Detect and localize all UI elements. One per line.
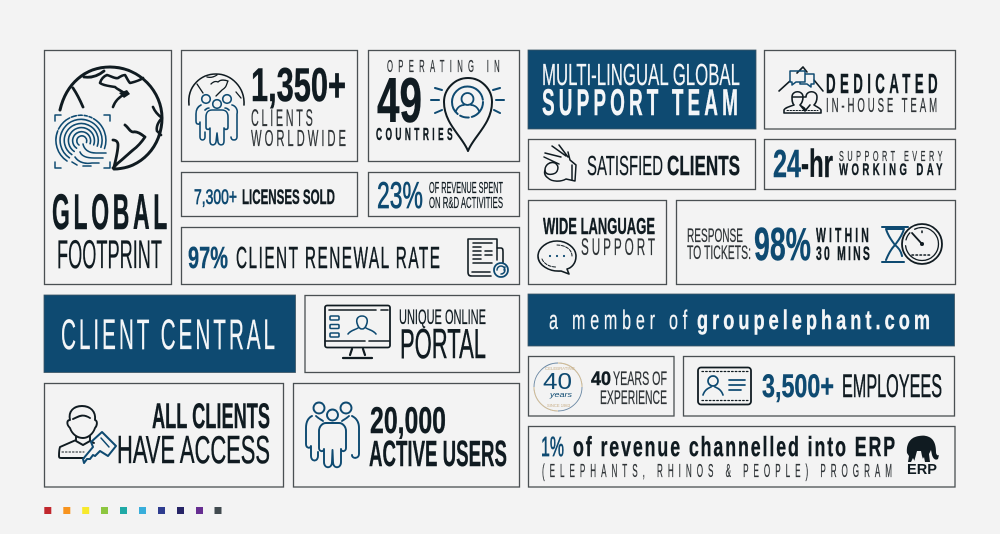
stat: 49: 49 bbox=[377, 66, 422, 136]
label: 40 years of: 40 bbox=[591, 369, 611, 390]
stat: 3,500+: 3,500+ bbox=[762, 368, 834, 404]
icon: renewal document bbox=[468, 239, 508, 277]
panel: client central: CLIENT CENTRAL bbox=[61, 311, 278, 359]
icon: 40 years badge: 40 bbox=[543, 368, 572, 394]
icon: three users bbox=[306, 402, 359, 467]
icon: speech bubble bbox=[538, 241, 576, 274]
panel: client renewal rate: CLIENT RENEWAL RATE bbox=[236, 240, 442, 275]
stat: 23%: 23% bbox=[377, 175, 423, 216]
panel: unique online portal bbox=[305, 296, 520, 372]
panel: satisfied clients bbox=[528, 140, 756, 190]
icon: user with key bbox=[59, 406, 116, 463]
icon: ERP elephant logo: ERP bbox=[907, 462, 937, 478]
label: satisfied: SATISFIED bbox=[587, 150, 663, 181]
panel: operating in 49 countries: COUNTRIES bbox=[376, 124, 456, 144]
panel: 1% revenue ERP program bbox=[528, 426, 955, 487]
icon: ERP elephant logo bbox=[907, 436, 939, 478]
icon: location pin with user bbox=[431, 78, 504, 151]
text: GLOBAL bbox=[52, 184, 171, 240]
stat: 24: 24 bbox=[773, 143, 801, 186]
icon: 40 years badge bbox=[534, 363, 582, 411]
panel: R&D spending: OF REVENUE SPENT bbox=[429, 180, 503, 197]
heading: multi-lingual global: MULTI-LINGUAL GLOBAL bbox=[542, 57, 740, 92]
icon: 40 years badge: SINCE 1983 bbox=[547, 403, 571, 408]
panel: 1,350+ clients: CLIENTS bbox=[251, 105, 316, 132]
heading: have access: HAVE ACCESS bbox=[117, 429, 270, 472]
panel: 3,500+ employees bbox=[684, 356, 954, 416]
icon: 40 years badge: CELEBRATING bbox=[545, 366, 575, 371]
icon: globe with people bbox=[189, 74, 244, 145]
label: response: RESPONSE bbox=[687, 226, 743, 247]
colour swatch row bbox=[44, 507, 221, 514]
icon: monitor with user bbox=[325, 306, 390, 358]
panel: R&D spending: ON R&D ACTIVITIES bbox=[429, 195, 503, 212]
text: OPERATING IN bbox=[387, 56, 505, 76]
icon: 40 years badge: years bbox=[549, 390, 572, 399]
panel: 20,000 active users bbox=[294, 384, 520, 487]
stat: 98%: 98% bbox=[754, 218, 811, 270]
panel: multi-lingual global support team bbox=[528, 50, 756, 129]
icon: OK hand bbox=[544, 145, 576, 181]
heading: all clients: ALL CLIENTS bbox=[152, 397, 270, 436]
panel: R&D spending bbox=[368, 172, 520, 216]
icon: globe with fingerprint bbox=[55, 67, 162, 169]
panel: global footprint bbox=[44, 50, 172, 284]
stat: 1,350+: 1,350+ bbox=[251, 58, 346, 111]
panel: response to tickets bbox=[676, 200, 956, 284]
label: wide language: WIDE LANGUAGE bbox=[543, 213, 655, 239]
label: active users: ACTIVE USERS bbox=[369, 433, 507, 474]
stat: 1%: 1% bbox=[541, 431, 564, 462]
label: licenses sold: LICENSES SOLD bbox=[242, 186, 335, 209]
panel: dedicated in-house team bbox=[764, 50, 956, 129]
text: FOOTPRINT bbox=[57, 233, 162, 277]
icon: in-house team bbox=[779, 67, 823, 113]
panel: all clients have access bbox=[44, 384, 284, 487]
stat: 97%: 97% bbox=[188, 240, 228, 275]
label: 30 mins: 30 MINS bbox=[816, 244, 872, 265]
panel: operating in 49 countries bbox=[368, 50, 520, 162]
label: to tickets: TO TICKETS: bbox=[687, 243, 751, 264]
label: clients: CLIENTS bbox=[667, 150, 740, 181]
label: years of: YEARS OF bbox=[613, 369, 667, 390]
panel: member of groupelephant.com bbox=[528, 294, 954, 346]
panel: 24-hr support bbox=[764, 140, 956, 190]
heading: portal: PORTAL bbox=[400, 320, 486, 367]
panel: 1,350+ clients bbox=[182, 50, 358, 162]
panel: 40 years of experience bbox=[528, 356, 674, 416]
label: experience: EXPERIENCE bbox=[600, 387, 667, 409]
icon: hourglass and clock bbox=[882, 224, 942, 264]
panel: wide language support bbox=[528, 200, 666, 284]
label: a member of: a member of bbox=[549, 305, 692, 335]
stat: 7,300+: 7,300+ bbox=[194, 186, 237, 209]
label: unique online: UNIQUE ONLINE bbox=[399, 305, 486, 329]
panel: wide language support: SUPPORT bbox=[581, 234, 658, 261]
heading: support team: SUPPORT TEAM bbox=[542, 82, 742, 123]
panel: 1,350+ clients: WORLDWIDE bbox=[251, 125, 349, 151]
stat: 20,000: 20,000 bbox=[370, 400, 446, 441]
panel: client central bbox=[44, 295, 296, 372]
stat: -hr: -hr bbox=[801, 143, 833, 186]
icon: ID card bbox=[698, 368, 751, 404]
panel: client renewal rate bbox=[182, 228, 520, 284]
label: within: WITHIN bbox=[816, 225, 872, 247]
panel: licenses sold bbox=[182, 172, 358, 216]
